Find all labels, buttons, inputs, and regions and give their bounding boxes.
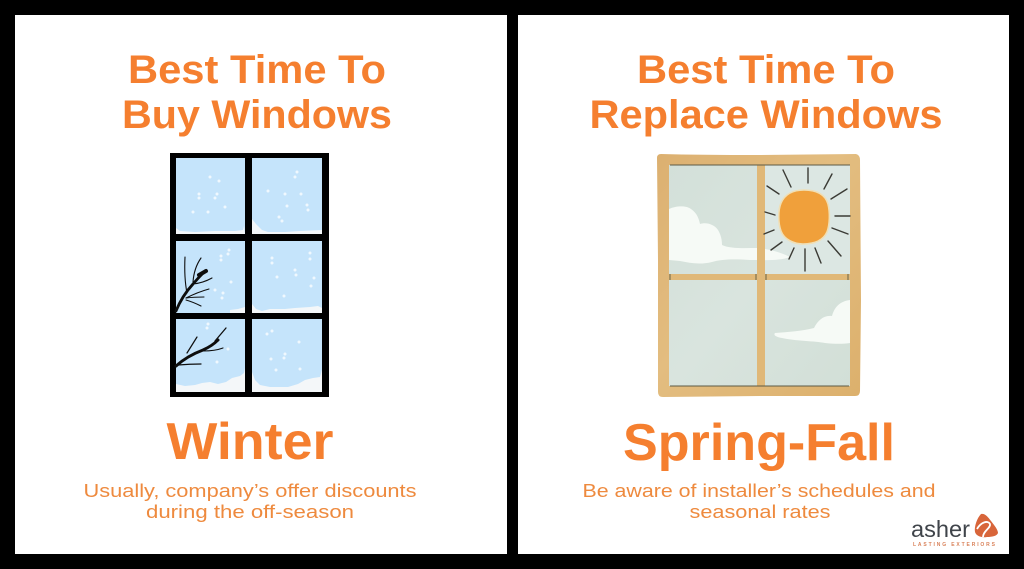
description: winter: Usually, company’s offer discounts	[84, 480, 416, 501]
window panes	[176, 158, 322, 392]
heading: best time to buy windows: Buy Windows	[122, 93, 392, 137]
logo: asher	[911, 514, 998, 548]
snow drifts	[176, 219, 322, 392]
description: spring-fall: seasonal rates	[690, 501, 830, 522]
description: winter	[84, 480, 416, 522]
glass	[669, 165, 850, 386]
description: spring-fall: Be aware of installer’s schedules and	[582, 480, 936, 501]
heading: best time to replace windows	[590, 48, 942, 137]
heading: best time to buy windows: Best Time To	[128, 48, 386, 92]
label: spring-fall: Spring-Fall	[623, 414, 895, 472]
panel: best time to buy windows	[15, 15, 507, 554]
description: winter: during the off-season	[146, 501, 354, 522]
illustration: spring window	[657, 154, 861, 397]
label: winter: Winter	[166, 413, 334, 471]
logo mark	[975, 514, 998, 537]
tree branch upper	[176, 257, 212, 311]
window frame	[657, 154, 861, 397]
description: spring-fall	[582, 480, 936, 522]
frame shadow lines	[670, 165, 850, 386]
logo: asher: LASTING EXTERIORS	[913, 542, 996, 548]
clouds	[669, 206, 850, 344]
heading: best time to replace windows: Best Time To	[637, 48, 895, 92]
sun rays	[764, 168, 850, 271]
snowflakes	[192, 170, 316, 372]
heading: best time to buy windows	[122, 48, 392, 137]
upper right lighter glass	[765, 165, 850, 274]
heading: best time to replace windows: Replace Windows	[590, 93, 942, 137]
illustration: winter window	[170, 153, 329, 397]
sun	[779, 190, 829, 244]
panel: best time to replace windows	[518, 15, 1009, 554]
logo: asher: asher	[911, 516, 970, 542]
tree branch lower	[176, 328, 226, 366]
window muntins	[669, 165, 850, 386]
